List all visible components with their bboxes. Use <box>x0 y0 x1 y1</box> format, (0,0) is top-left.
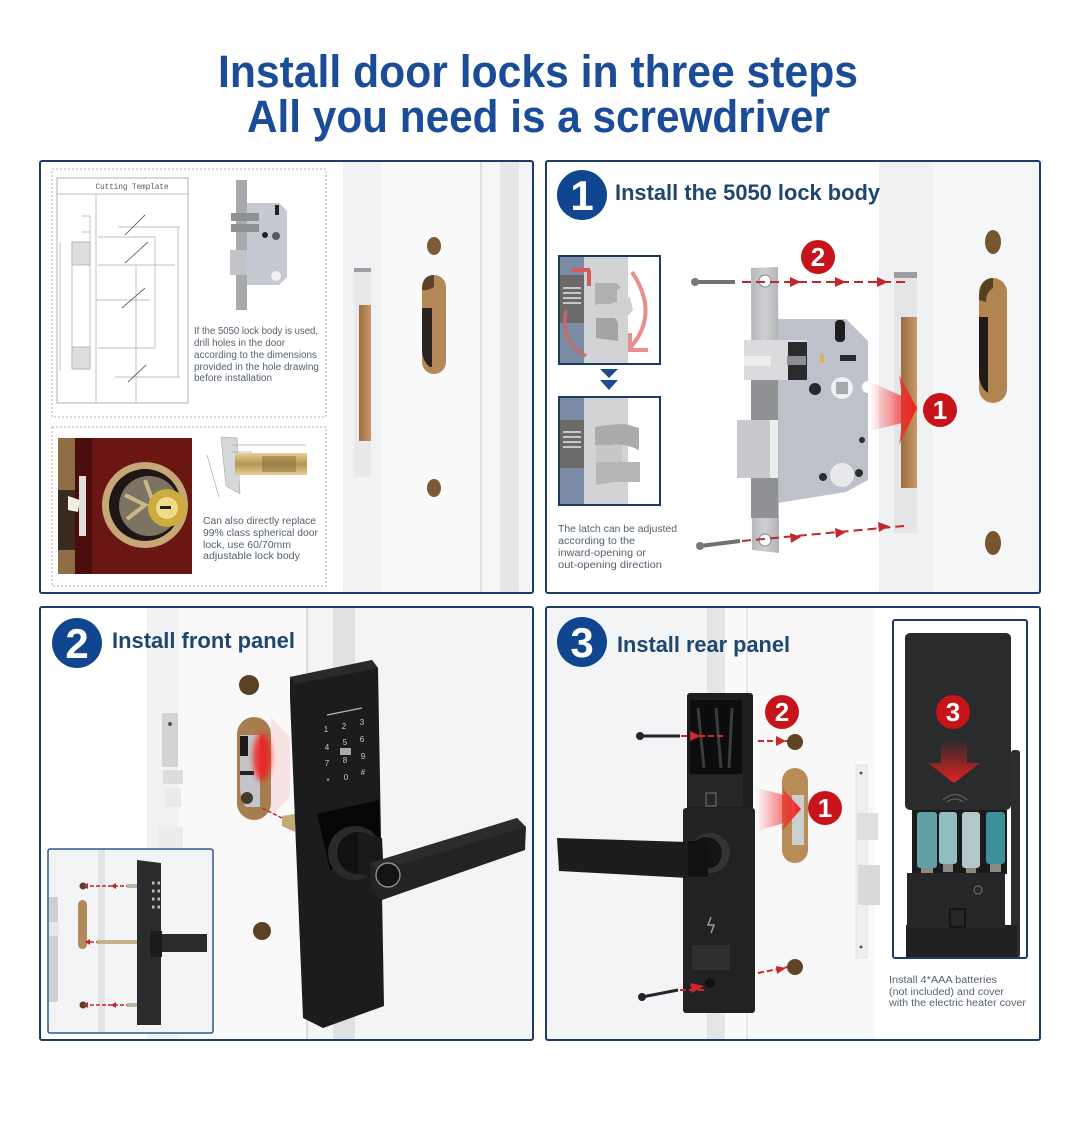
text: 5050 lock body note <box>194 326 319 384</box>
keypad digits: 9 <box>361 752 366 761</box>
keypad digits: 3 <box>360 718 365 727</box>
step 2 number badge: 2 <box>65 620 89 667</box>
step 1 number badge <box>557 170 607 220</box>
text: 5050 lock body note: If the 5050 lock body is used, <box>194 326 318 337</box>
panel: preparation and hole drilling <box>40 161 533 593</box>
icon: small lock body <box>230 180 287 310</box>
keypad digits: # <box>361 768 366 777</box>
text: 5050 lock body note: drill holes in the door <box>194 338 286 349</box>
panel: step 1 install lock body <box>546 161 1040 593</box>
cutting template drawing: Cutting Template <box>96 183 169 192</box>
badge: red 2: 2 <box>811 242 825 272</box>
keypad digits: 5 <box>343 738 348 747</box>
arrow: red push arrow <box>757 788 801 831</box>
glow inside the opening <box>253 733 271 781</box>
keypad digits: 8 <box>343 756 348 765</box>
text: battery note: with the electric heater cover <box>888 998 1027 1009</box>
title: All you need is a screwdriver <box>247 91 830 142</box>
arrow: red down arrow <box>928 740 980 783</box>
title: Install door locks in three steps <box>218 46 858 97</box>
arrow: red push arrow into mortise <box>870 375 917 445</box>
text: 5050 lock body note: according to the dimensions <box>194 350 317 361</box>
inset: battery compartment <box>893 620 1027 958</box>
keypad digits: 1 <box>324 725 329 734</box>
dotted box: cutting template <box>52 169 326 417</box>
rear lock panel with lever <box>557 693 755 1013</box>
lock body at door edge <box>158 713 183 848</box>
panel: step 2 install front panel <box>40 607 533 1040</box>
door holes <box>782 734 808 975</box>
text: replacement note: lock, use 60/70mm <box>203 540 291 551</box>
door background <box>547 608 875 1039</box>
heading: step 3: Install rear panel <box>617 632 790 657</box>
badge: red 3: 3 <box>946 697 960 727</box>
text: battery note: Install 4*AAA batteries <box>889 975 997 986</box>
text: replacement note: 99% class spherical door <box>203 528 319 539</box>
keypad digits: 7 <box>325 759 330 768</box>
step 2 number badge <box>52 618 102 668</box>
badge: red 2 <box>801 240 835 274</box>
text: 5050 lock body note: provided in the hole drawing <box>194 362 319 373</box>
heading: step 1: Install the 5050 lock body <box>615 180 881 205</box>
photo: knob lock on red door <box>58 438 192 574</box>
lock body side view <box>856 765 880 958</box>
cutting template drawing <box>57 178 188 403</box>
keypad digits <box>324 718 366 786</box>
badge: red 2 <box>765 695 799 729</box>
AAA batteries <box>917 812 1005 873</box>
front lock panel with keypad and lever <box>290 660 526 1028</box>
badge: red 1: 1 <box>933 395 947 425</box>
keypad digits: 2 <box>342 722 347 731</box>
text: latch note: out-opening direction <box>558 560 662 571</box>
pale red beam from panel to opening <box>271 717 290 817</box>
title <box>218 46 858 142</box>
step 3 number badge <box>557 617 607 667</box>
text: latch note: The latch can be adjusted <box>558 524 677 535</box>
detail: latch after adjustment <box>559 397 660 505</box>
badge: red 1 <box>923 393 957 427</box>
badge: red 2: 2 <box>775 697 789 727</box>
keypad digits: 0 <box>344 773 349 782</box>
text: latch note <box>558 524 677 571</box>
keypad digits: 4 <box>325 743 330 752</box>
lock body illustration <box>737 267 874 553</box>
badge: red 1 <box>808 791 842 825</box>
spindle with dashed arrow <box>262 808 295 832</box>
door with mortise <box>879 162 1039 592</box>
screws and dashed arrows <box>636 731 788 1001</box>
badge: red 1: 1 <box>818 793 832 823</box>
inset: front panel side view <box>48 849 213 1033</box>
icon: adjustable latch <box>207 437 307 497</box>
door holes with lock visible <box>237 675 271 940</box>
text: latch note: according to the <box>558 536 635 547</box>
keypad digits: 6 <box>360 735 365 744</box>
panel: step 3 install rear panel <box>546 607 1040 1040</box>
dotted box: spherical door lock replacement <box>52 427 326 586</box>
text: 5050 lock body note: before installation <box>194 373 272 384</box>
detail: latch before adjustment <box>559 256 660 364</box>
text: replacement note <box>203 516 319 562</box>
heading: step 2: Install front panel <box>112 628 295 653</box>
text: latch note: inward-opening or <box>558 548 647 559</box>
badge: red 3 <box>936 695 970 729</box>
step 1 number badge: 1 <box>570 172 594 219</box>
door with cut holes <box>343 162 533 592</box>
keypad digits: * <box>326 777 330 786</box>
step 3 number badge: 3 <box>570 619 594 666</box>
door leaf and frame background <box>41 608 355 1039</box>
arrow: double down chevron <box>600 369 618 390</box>
text: battery note <box>888 975 1027 1009</box>
text: replacement note: adjustable lock body <box>203 551 300 562</box>
text: replacement note: Can also directly replace <box>203 516 316 527</box>
text: battery note: (not included) and cover <box>889 987 1005 998</box>
screws with dashed red arrows <box>691 277 905 550</box>
